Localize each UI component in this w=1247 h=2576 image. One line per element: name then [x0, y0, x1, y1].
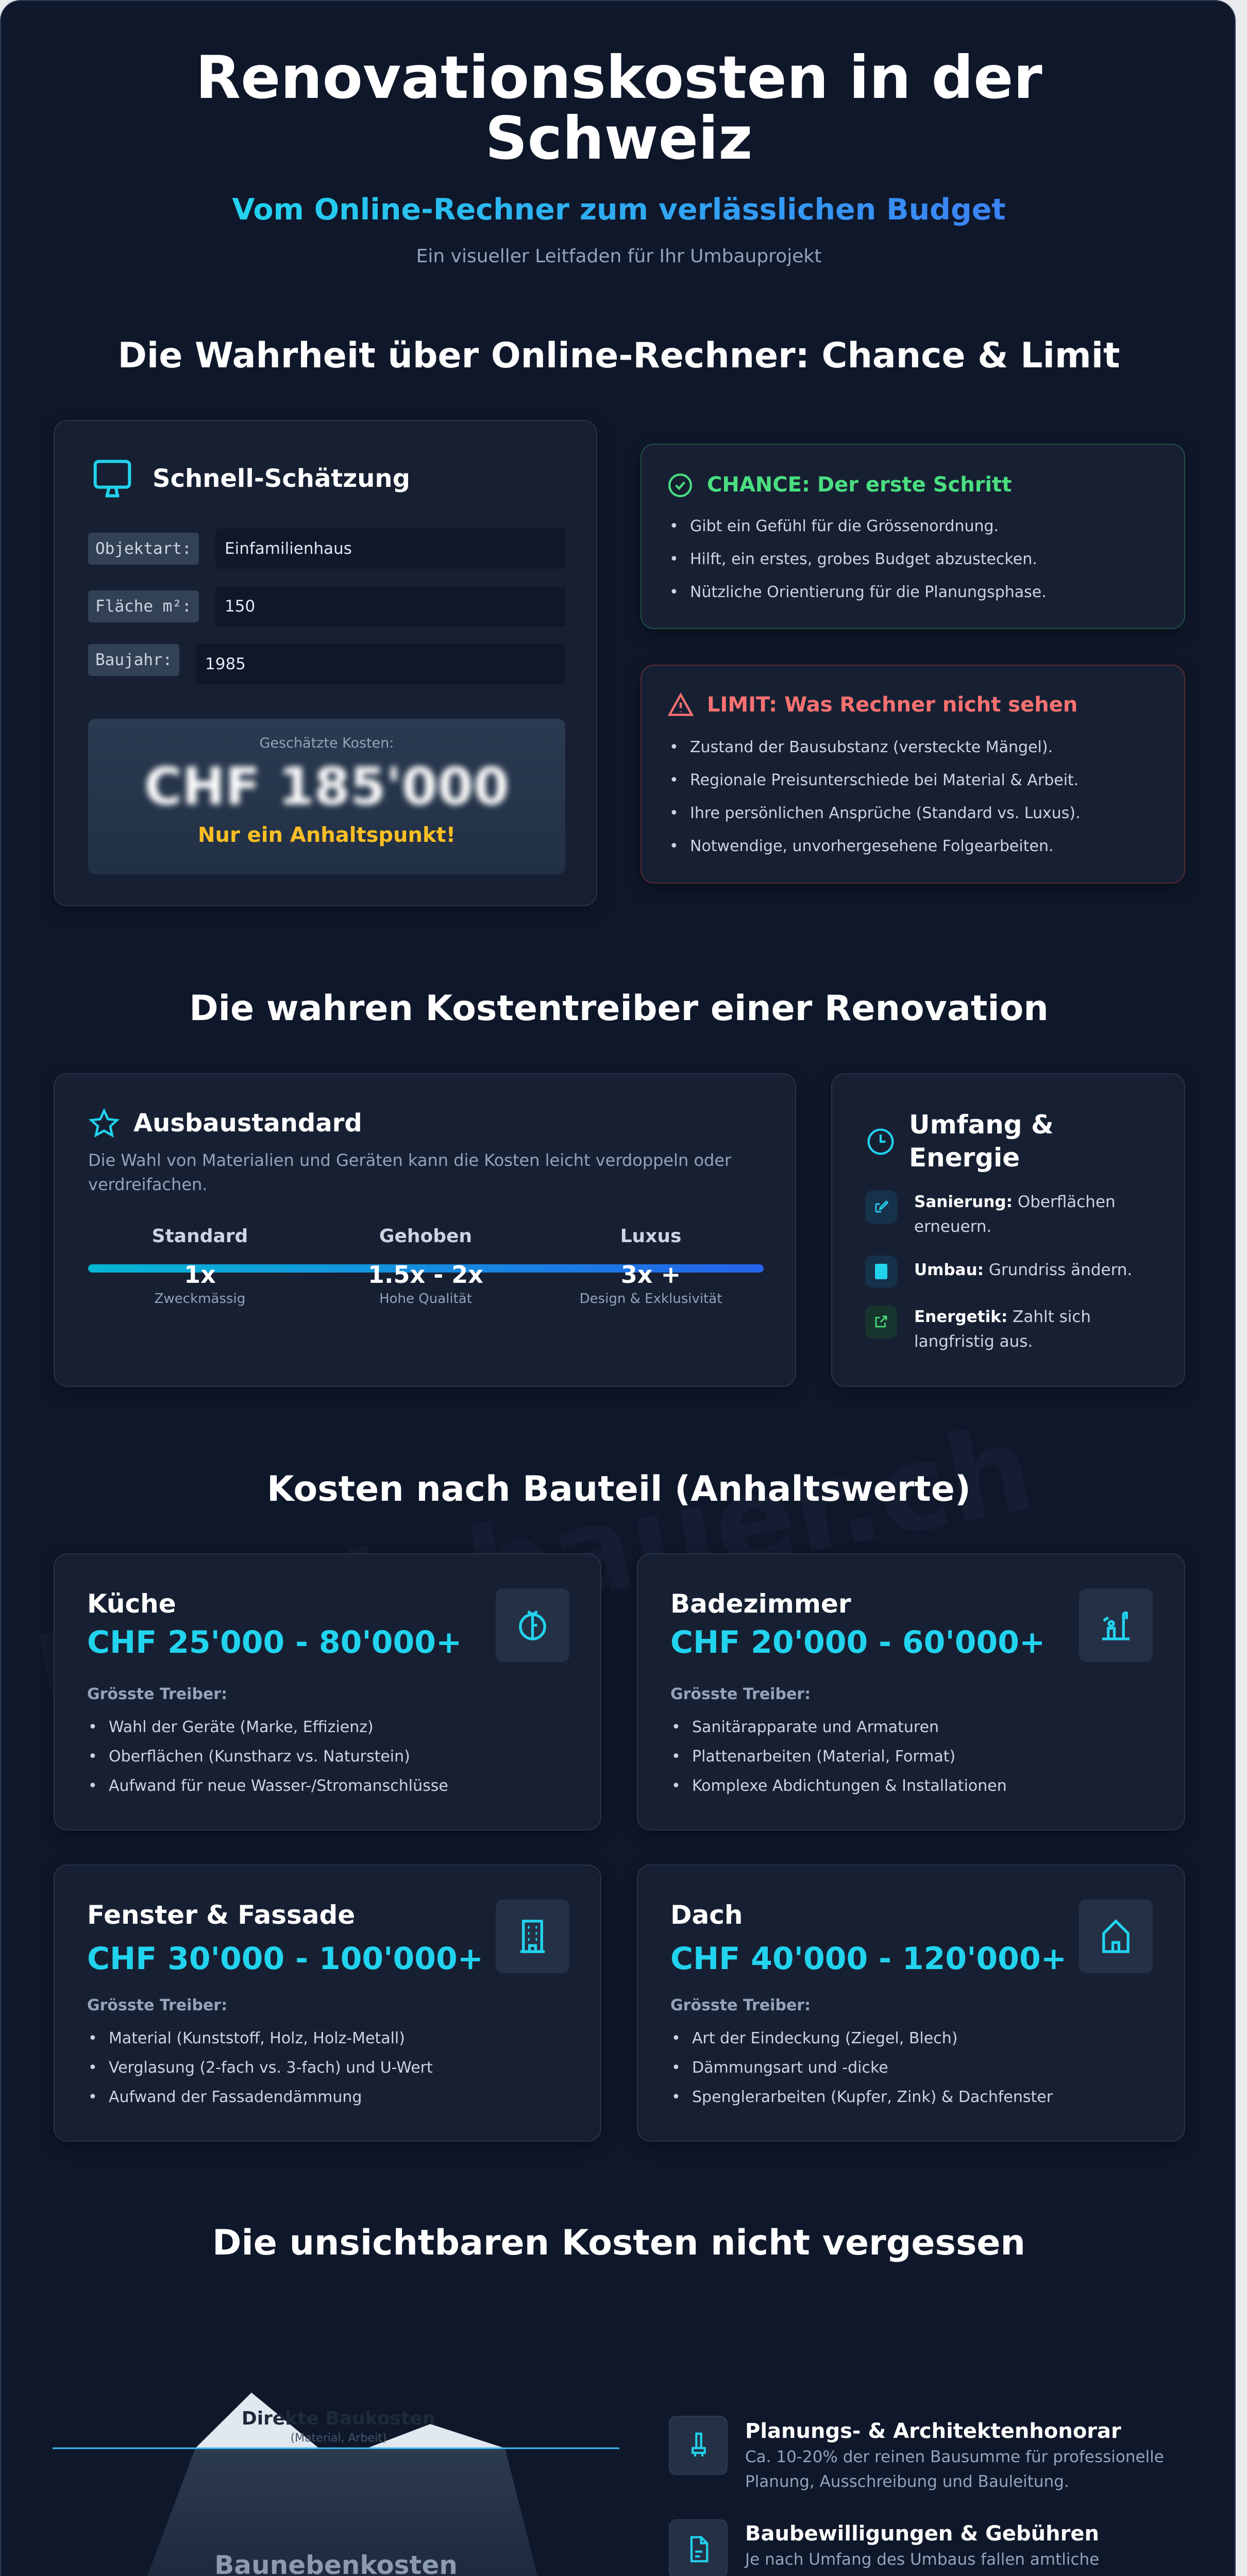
panel: dach: Grösste Treiber:	[670, 1996, 811, 2014]
watermark: martinbauer.ch	[22, 1399, 1043, 1728]
title: Schweiz	[485, 104, 752, 173]
panel: küche: CHF 25'000 - 80'000+	[87, 1624, 462, 1660]
icon: clock	[868, 1128, 894, 1155]
panel: badezimmer: CHF 20'000 - 60'000+	[670, 1624, 1045, 1660]
icon: check	[668, 473, 692, 497]
panel: küche: Aufwand für neue Wasser-/Stromanschlüsse	[109, 1777, 448, 1795]
level: gehoben	[368, 1226, 483, 1307]
panel: küche: Küche	[87, 1589, 176, 1619]
panel: ausbaustandard	[54, 1073, 796, 1387]
input rows: 150	[225, 597, 255, 616]
item: baubewilligungen	[669, 2519, 1099, 2576]
bullets: Ihre persönlichen Ansprüche (Standard vs. Luxus).	[690, 804, 1081, 822]
item: planungshonorar	[669, 2416, 1164, 2491]
panel: küche	[54, 1553, 601, 1831]
chart: iceberg: (Material, Arbeit)	[291, 2432, 386, 2445]
input rows: Objektart:	[95, 539, 192, 558]
panel: chance	[641, 444, 1185, 629]
level: luxus: Design & Exklusivität	[580, 1291, 722, 1307]
panel: fenster & fassade: Grösste Treiber:	[87, 1996, 227, 2014]
icon: bath	[1079, 1588, 1153, 1662]
icon: monitor	[94, 460, 131, 498]
item: planungshonorar: Ca. 10-20% der reinen Bausumme für professionelle Planung, Ausschreibung und Bauleitung.	[745, 2448, 1164, 2491]
panel: badezimmer: Plattenarbeiten (Material, Format)	[692, 1748, 955, 1766]
panel: fenster & fassade: Fenster & Fassade	[87, 1900, 355, 1930]
input rows: 1985	[205, 655, 246, 673]
title	[195, 43, 1042, 173]
bullets	[672, 517, 1047, 601]
bullets: Zustand der Bausubstanz (versteckte Mängel).	[690, 738, 1053, 756]
panel: fenster & fassade	[54, 1865, 601, 2142]
bullets: Hilft, ein erstes, grobes Budget abzustecken.	[690, 550, 1037, 568]
level: standard: Standard	[152, 1226, 248, 1247]
icon: warning	[668, 692, 694, 716]
item: umbau: Umbau: Grundriss ändern.	[914, 1261, 1132, 1279]
level: standard: 1x	[184, 1261, 216, 1289]
chart: iceberg	[53, 2393, 619, 2576]
heading: Ausbaustandard	[133, 1109, 362, 1138]
heading: kosten nach bauteil: Kosten nach Bauteil (Anhaltswerte)	[267, 1469, 971, 1510]
scale bar	[88, 1264, 764, 1273]
bullets: Nützliche Orientierung für die Planungsphase.	[690, 583, 1047, 601]
tagline: Ein visueller Leitfaden für Ihr Umbauprojekt	[416, 246, 821, 267]
level: gehoben: Gehoben	[379, 1226, 472, 1247]
level: standard: Zweckmässig	[155, 1291, 245, 1307]
heading: CHANCE: Der erste Schritt	[707, 473, 1012, 497]
heading: Umfang &	[909, 1110, 1054, 1140]
heading: LIMIT: Was Rechner nicht sehen	[707, 693, 1077, 717]
panel: schnell-schätzung	[54, 420, 597, 906]
panel: küche: Wahl der Geräte (Marke, Effizienz)	[109, 1718, 374, 1736]
heading: Schnell-Schätzung	[153, 464, 410, 493]
panel: dach: CHF 40'000 - 120'000+	[670, 1941, 1067, 1977]
heading	[909, 1110, 1054, 1173]
input rows	[88, 529, 565, 684]
panel: dach: Dämmungsart und -dicke	[692, 2059, 888, 2077]
panel: badezimmer: Badezimmer	[670, 1589, 851, 1619]
panel: dach: Art der Eindeckung (Ziegel, Blech)	[692, 2029, 957, 2047]
item: energetik: Energetik: Zahlt sich langfristig aus.	[914, 1308, 1091, 1351]
item: umbau	[865, 1256, 1132, 1287]
bullets: Gibt ein Gefühl für die Grössenordnung.	[690, 517, 999, 535]
heading: kostentreiber: Die wahren Kostentreiber einer Renovation	[189, 988, 1049, 1029]
description: Die Wahl von Materialien und Geräten kann die Kosten leicht verdoppeln oder verdreifachen.	[88, 1150, 731, 1194]
level: standard	[152, 1226, 248, 1307]
input rows: Fläche m²:	[95, 597, 192, 616]
result box: Geschätzte Kosten:	[260, 735, 394, 751]
panel: fenster & fassade: CHF 30'000 - 100'000+	[87, 1941, 483, 1977]
panel: badezimmer: Grösste Treiber:	[670, 1685, 811, 1703]
panel: fenster & fassade: Material (Kunststoff, Holz, Holz-Metall)	[109, 2029, 405, 2047]
chart: iceberg: Direkte Baukosten	[242, 2408, 435, 2429]
panel: limit	[641, 665, 1185, 884]
panel: badezimmer	[637, 1553, 1185, 1831]
input rows: Baujahr:	[95, 651, 172, 669]
item: baubewilligungen: Baubewilligungen & Gebühren	[745, 2522, 1099, 2546]
heading: unsichtbare kosten: Die unsichtbaren Kosten nicht vergessen	[212, 2223, 1025, 2263]
result box: CHF 185'000	[144, 756, 509, 817]
input rows: Einfamilienhaus	[225, 539, 352, 558]
result box	[88, 719, 565, 874]
level: gehoben: Hohe Qualität	[379, 1291, 472, 1307]
level: gehoben: 1.5x - 2x	[368, 1261, 483, 1289]
bullets	[672, 738, 1081, 855]
item: sanierung: Sanierung: Oberflächen erneuern.	[914, 1193, 1116, 1236]
subtitle: Vom Online-Rechner zum verlässlichen Budget	[232, 193, 1006, 227]
panel: küche: Grösste Treiber:	[87, 1685, 227, 1703]
level: luxus	[580, 1226, 722, 1307]
heading: online-rechner: Die Wahrheit über Online-Rechner: Chance & Limit	[117, 335, 1120, 376]
panel: fenster & fassade: Aufwand der Fassadendämmung	[109, 2088, 362, 2106]
panel: fenster & fassade: Verglasung (2-fach vs. 3-fach) und U-Wert	[109, 2059, 433, 2077]
panel: umfang & energie	[831, 1073, 1185, 1387]
bullets: Notwendige, unvorhergesehene Folgearbeiten.	[690, 837, 1053, 855]
icon: star	[89, 1108, 120, 1138]
bullets: Regionale Preisunterschiede bei Material & Arbeit.	[690, 771, 1079, 789]
heading: Energie	[909, 1143, 1020, 1173]
panel: dach: Spenglerarbeiten (Kupfer, Zink) & Dachfenster	[692, 2088, 1053, 2106]
panel: badezimmer: Komplexe Abdichtungen & Installationen	[692, 1777, 1007, 1795]
icon: building	[496, 1900, 569, 1973]
panel: küche: Oberflächen (Kunstharz vs. Naturstein)	[109, 1748, 410, 1766]
panel: dach: Dach	[670, 1900, 743, 1930]
title: Renovationskosten in der	[195, 43, 1042, 112]
item: planungshonorar: Planungs- & Architektenhonorar	[745, 2419, 1121, 2443]
level: luxus: 3x +	[621, 1261, 681, 1289]
panel: dach	[637, 1865, 1185, 2142]
level: luxus: Luxus	[620, 1226, 681, 1247]
icon: house	[1079, 1900, 1153, 1973]
result box: Nur ein Anhaltspunkt!	[198, 823, 456, 847]
panel: badezimmer: Sanitärapparate und Armaturen	[692, 1718, 939, 1736]
icon: kitchen	[496, 1588, 569, 1662]
